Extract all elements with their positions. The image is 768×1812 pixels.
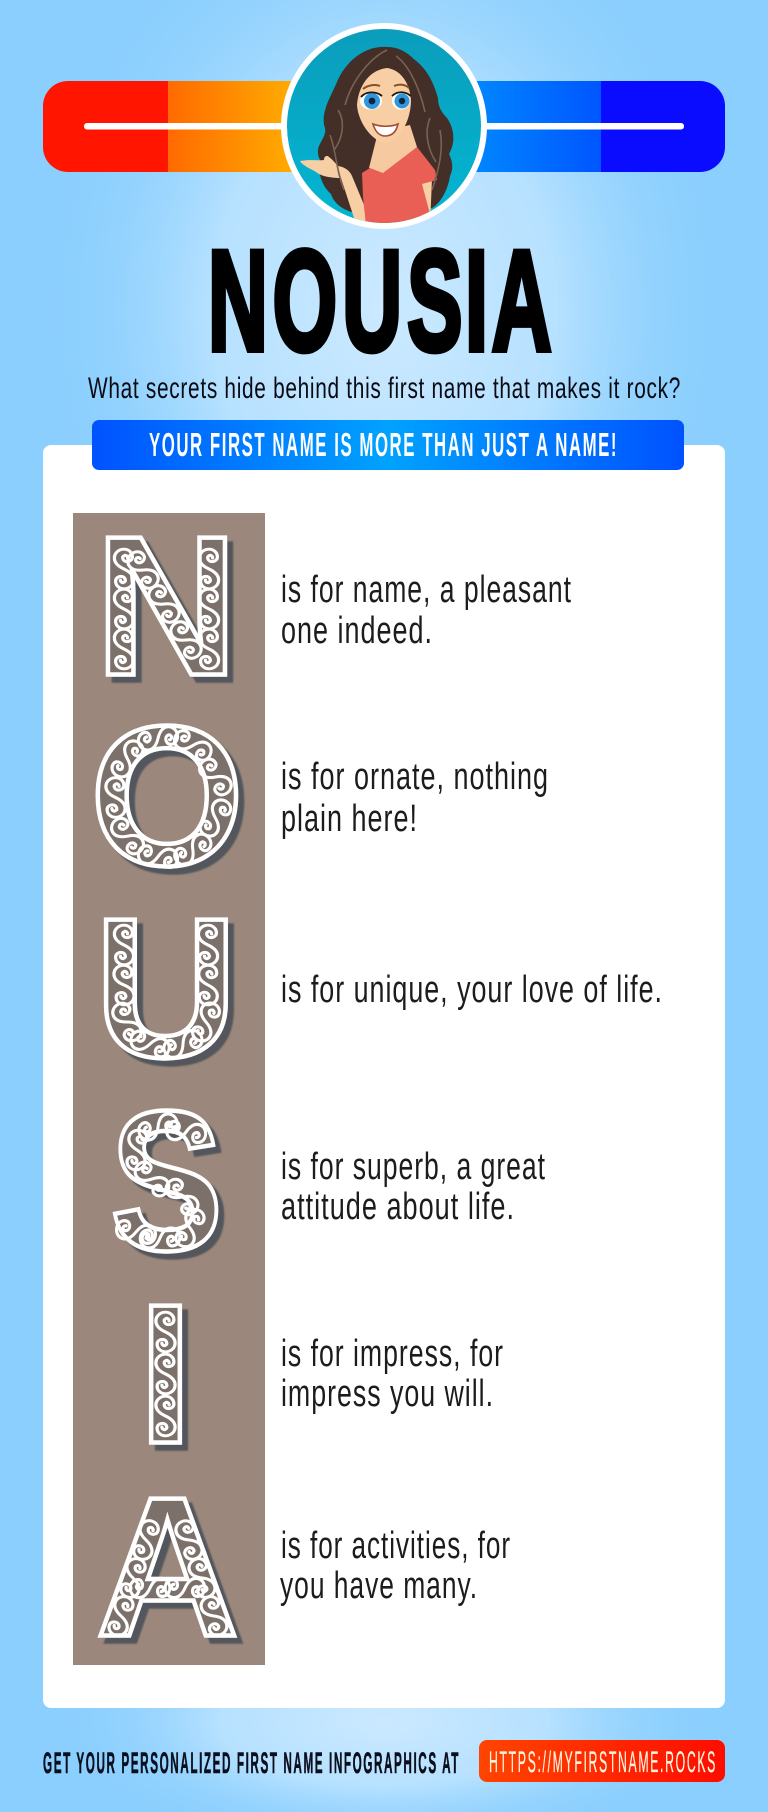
hair strands [330, 50, 441, 190]
text: N line [281, 569, 572, 652]
letter S: S [110, 1070, 223, 1292]
text: A line: you have many. [280, 1565, 478, 1607]
title: NOUSIA [208, 220, 552, 381]
text: S line: is for superb, a great [281, 1146, 546, 1188]
letter O: O [90, 686, 244, 908]
letter N: N [95, 496, 238, 718]
eyes [360, 85, 411, 110]
shirt [362, 147, 437, 226]
text: N line: one indeed. [281, 610, 433, 652]
text: S line [281, 1146, 546, 1228]
letter I: I [138, 1264, 193, 1486]
avatar: smiling woman in circle [281, 23, 487, 229]
text: I line: is for impress, for [281, 1333, 504, 1375]
other arm [419, 181, 432, 216]
banner [92, 420, 684, 470]
text: A line: is for activities, for [281, 1525, 511, 1567]
text: O line: is for ornate, nothing [281, 756, 549, 798]
hair [318, 47, 453, 212]
footer url button [479, 1740, 725, 1782]
white card [43, 445, 725, 1708]
face [357, 68, 411, 143]
neck and skin [369, 125, 417, 176]
text: I line [281, 1333, 504, 1415]
text: O line [281, 756, 549, 840]
header colour bar [43, 81, 725, 172]
arm and hand [300, 156, 372, 224]
panel: brown letter column [73, 513, 265, 1665]
text: I line: impress you will. [281, 1373, 494, 1415]
text: S line: attitude about life. [281, 1186, 515, 1228]
text: A line [280, 1525, 511, 1607]
text: O line: plain here! [281, 798, 418, 840]
letter U: U [94, 878, 238, 1100]
mouth [373, 124, 398, 136]
text: N line: is for name, a pleasant [281, 569, 572, 611]
letter A: A [96, 1456, 239, 1678]
